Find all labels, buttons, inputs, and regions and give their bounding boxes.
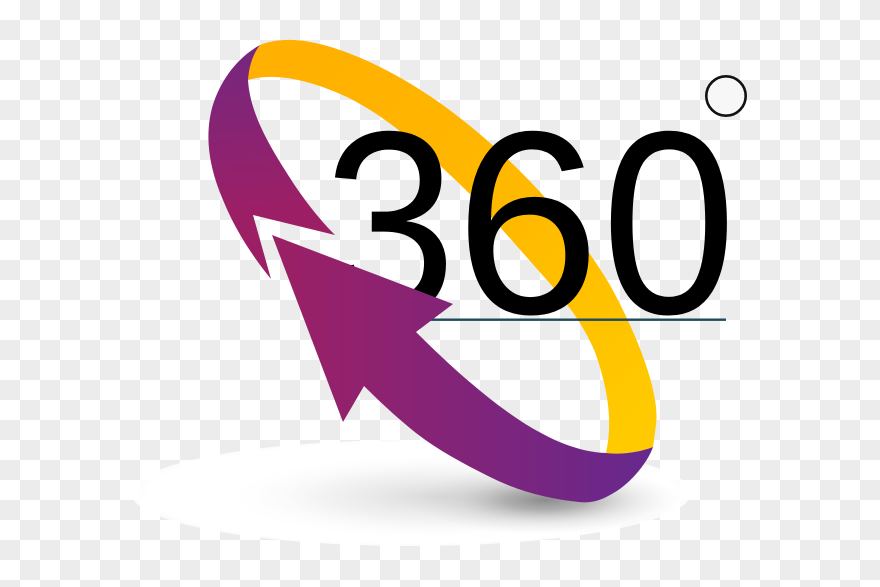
number 360 xyxy=(323,78,736,369)
underline xyxy=(428,318,726,321)
yellow ring band xyxy=(248,40,657,454)
shadow ellipse xyxy=(131,440,691,546)
purple upper arrow tail xyxy=(208,45,335,279)
degree symbol xyxy=(706,76,746,116)
number 360: 3 xyxy=(323,78,457,369)
purple main arrow xyxy=(272,235,653,502)
number 360: 6 xyxy=(455,78,600,369)
number 360: 0 xyxy=(601,78,736,369)
